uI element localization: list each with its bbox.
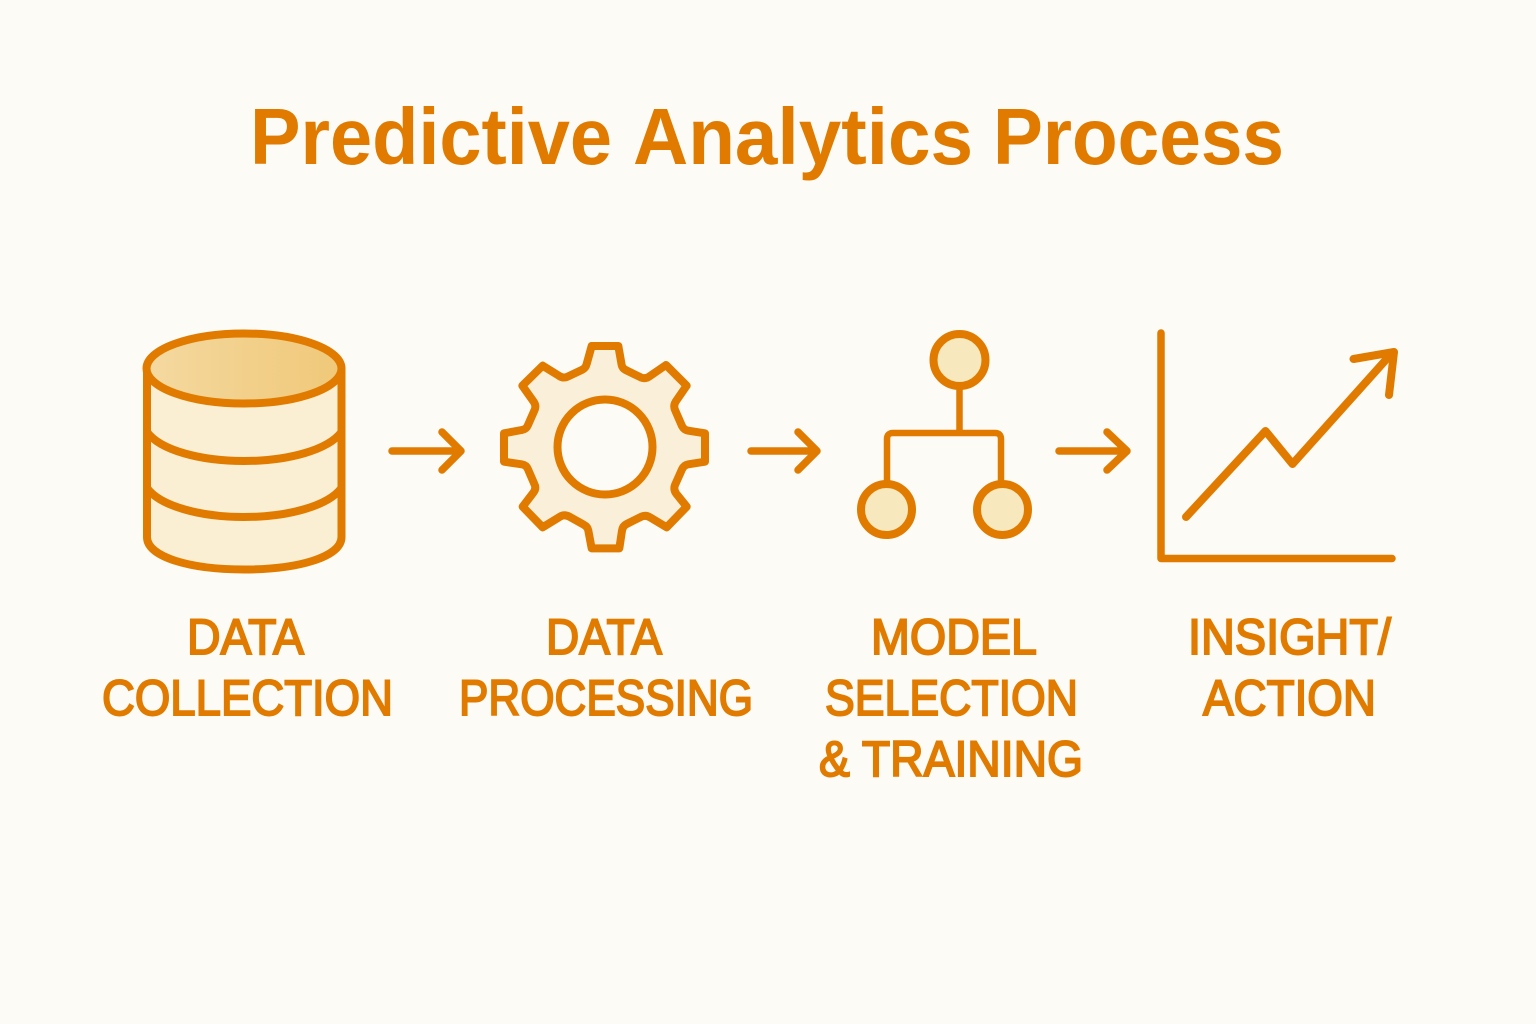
label: data processing: DATA bbox=[546, 609, 663, 665]
label: data collection: COLLECTION bbox=[102, 670, 393, 726]
arrow: processing to model bbox=[751, 432, 817, 470]
title bbox=[250, 92, 1284, 181]
label: data collection bbox=[102, 609, 393, 726]
title: Analytics bbox=[633, 92, 973, 181]
icon: model tree bbox=[861, 334, 1028, 535]
label: data processing: PROCESSING bbox=[459, 670, 753, 726]
arrow: model to insight bbox=[1059, 432, 1127, 470]
label: insight action bbox=[1188, 609, 1391, 726]
label: model selection and training: & TRAINING bbox=[819, 731, 1083, 787]
label: model selection and training: MODEL bbox=[871, 609, 1037, 665]
title: Process bbox=[993, 92, 1284, 181]
label: model selection and training: SELECTION bbox=[825, 670, 1078, 726]
icon: growth chart bbox=[1161, 333, 1394, 558]
label: data collection: DATA bbox=[187, 609, 305, 665]
label: data processing bbox=[459, 609, 753, 726]
label: insight action: ACTION bbox=[1203, 670, 1376, 726]
label: insight action: INSIGHT/ bbox=[1188, 609, 1391, 665]
icon: database cylinder bbox=[146, 334, 342, 570]
arrow: collection to processing bbox=[392, 432, 461, 470]
title: Predictive bbox=[250, 92, 612, 181]
label: model selection and training bbox=[819, 609, 1083, 787]
icon: gear bbox=[504, 346, 705, 548]
